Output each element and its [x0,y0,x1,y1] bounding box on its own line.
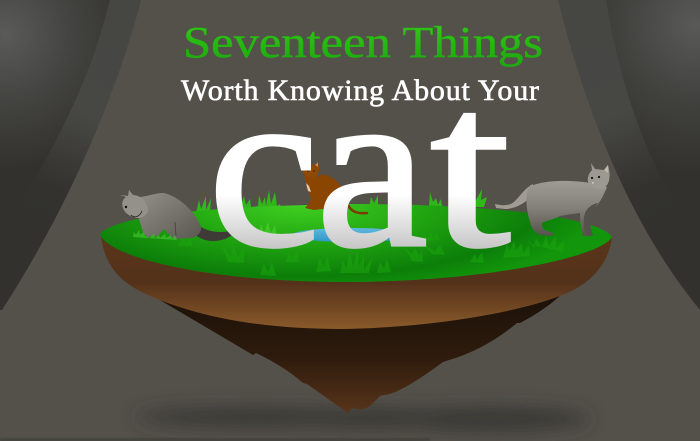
title: cat: c [208,39,320,296]
cat body [526,181,607,236]
pond [292,228,412,242]
cat tail [495,184,533,209]
island soil [101,236,612,329]
left curtain [0,0,141,310]
island grass top [100,204,612,282]
cat tuft [133,230,177,240]
cat head [588,163,610,189]
right curtain [558,0,700,310]
grass tuft highlight [258,222,277,236]
grass tufts front [178,231,565,276]
orange cat [303,161,367,213]
right gray cat [495,163,610,236]
cat body [304,174,346,212]
title: cat [208,38,512,296]
cat body [138,193,201,239]
island underside [143,290,562,413]
title: cat: a [316,39,428,296]
grass tufts behind [196,189,487,213]
left gray cat [120,190,235,241]
floor edge [0,438,430,441]
subtitle: Worth Knowing About Your [181,74,539,107]
floating island [100,189,612,413]
cat tail [348,205,367,213]
cat tail [192,224,235,241]
cat head [120,190,148,218]
floor shadow [135,407,590,431]
title: cat: t [430,38,512,295]
title: Seventeen Things: Seventeen Things [183,17,543,67]
cat head [303,161,319,178]
